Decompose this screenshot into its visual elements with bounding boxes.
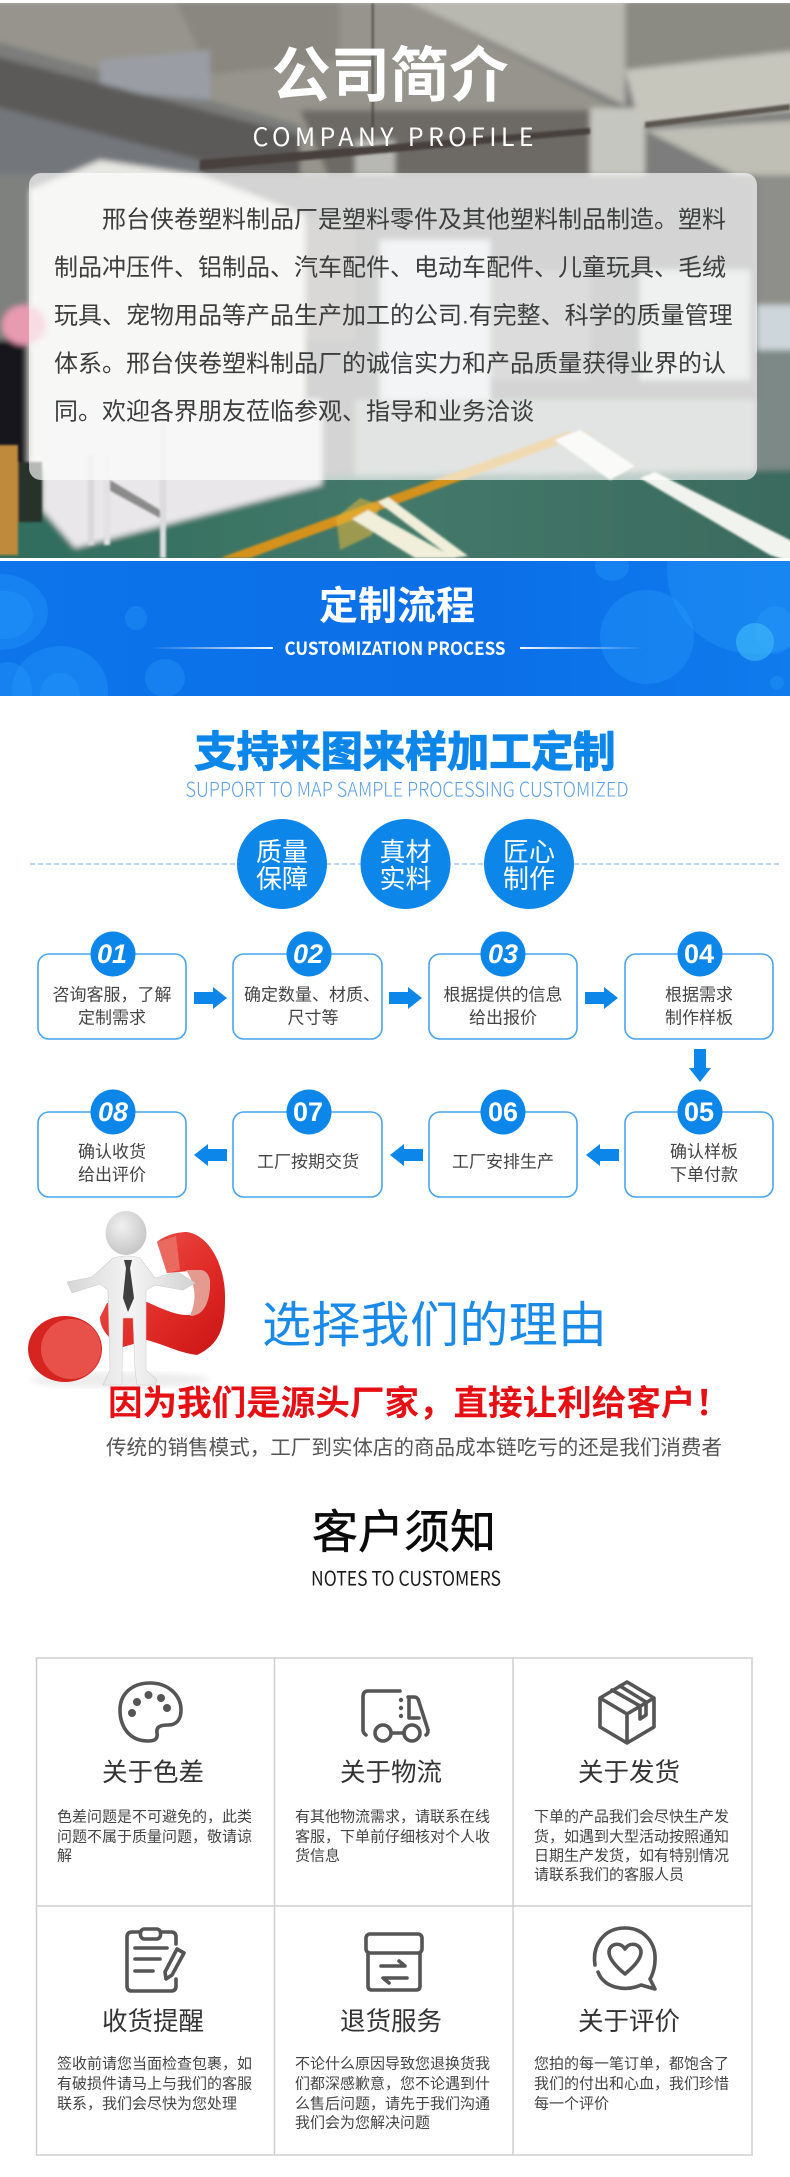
step 05: 下单付款 [670,1166,738,1184]
icon: palette [120,1683,181,1741]
subtitle: CUSTOMIZATION PROCESS [284,635,506,661]
step 02: 尺寸等 [288,1008,338,1028]
badge: quality: 保障 [256,864,308,894]
step 08: 确认收货 [78,1142,146,1162]
illustration: man and red question mark [28,1211,225,1388]
badge: craftsmanship [484,819,574,909]
subtitle: SUPPORT TO MAP SAMPLE PROCESSING CUSTOMIZED [186,774,628,802]
step 01: 01 [97,939,127,969]
text [57,2056,252,2112]
explanatory line: 传统的销售模式，工厂到实体店的商品成本链吃亏的还是我们消费者 [106,1436,722,1460]
text block: 制品冲压件、铝制品、汽车配件、电动车配件、儿童玩具、毛绒 [54,254,726,282]
card: receipt reminder [57,1929,252,2112]
card: returns [295,1934,490,2132]
text: 请联系我们的客服人员 [534,1866,684,1884]
step 08 [78,1097,146,1184]
step 06: 06 [488,1097,518,1127]
text: 解 [57,1848,72,1864]
icon: parcel box [600,1682,654,1743]
feature badges [30,819,782,909]
title: 公司简介 [272,42,508,110]
step 01 [52,939,172,1028]
icon: truck [363,1691,428,1741]
text: 问题不属于质量问题，敬请谅 [57,1828,252,1846]
badge: real material: 实料 [379,864,432,894]
step 07: 07 [293,1097,323,1127]
card: shipping [534,1682,729,1884]
text: 客服，下单前仔细核对个人收 [295,1828,490,1846]
step 04 [665,939,733,1028]
step 04: 根据需求 [665,986,733,1004]
text: 我们会为您解决问题 [295,2114,430,2132]
step 04: 04 [684,939,714,969]
badge: quality [237,819,327,909]
step 01: 定制需求 [78,1008,146,1028]
text [295,2056,490,2132]
text [295,1808,490,1864]
title: 支持来图来样加工定制 [194,728,616,776]
card: colour difference: 关于色差 [102,1759,204,1787]
text: 每一个评价 [534,2096,609,2112]
step 06: 工厂安排生产 [452,1152,554,1172]
text: 不论什么原因导致您退换货我 [295,2056,490,2072]
text: 有其他物流需求，请联系在线 [295,1808,490,1826]
step 05 [670,1097,738,1184]
heading: notes to customers: NOTES TO CUSTOMERS [311,1562,501,1592]
arrows [194,987,711,1166]
text: 下单的产品我们会尽快生产发 [534,1808,729,1826]
step 03: 给出报价 [469,1008,537,1028]
badge: quality: 质量 [256,837,308,867]
icon: return box [366,1934,422,1990]
step 04: 制作样板 [665,1008,733,1028]
notes grid [36,1658,752,2155]
text: 么售后问题，请先于我们沟通 [295,2096,490,2112]
text block: 邢台侠卷塑料制品厂是塑料零件及其他塑料制品制造。塑料 [102,206,726,234]
step 02: 02 [293,939,323,969]
text: 日期生产发货，如有特别情况 [534,1848,729,1864]
card: colour difference [57,1683,252,1864]
text block [54,206,733,426]
step 03 [444,939,562,1028]
text [534,1808,729,1884]
text: 我们的付出和心血，我们珍惜 [534,2076,729,2092]
card: receipt reminder: 收货提醒 [102,2008,204,2036]
badge: real material [360,819,450,909]
subtitle: COMPANY PROFILE [252,118,534,154]
text block: 同。欢迎各界朋友莅临参观、指导和业务洽谈 [54,398,534,426]
card: returns: 退货服务 [340,2008,442,2036]
panel: company description [29,173,757,480]
badge: craftsmanship: 制作 [503,864,555,894]
slogan in red: 因为我们是源头厂家，直接让利给客户！ [108,1385,730,1423]
step 01: 咨询客服，了解 [52,986,172,1004]
text: 货，如遇到大型活动按照通知 [534,1828,729,1846]
step 07: 工厂按期交货 [257,1152,359,1172]
step 08: 给出评价 [78,1166,146,1184]
text [57,1808,252,1864]
text [534,2056,729,2112]
factory photo background [0,0,790,570]
badge: real material: 真材 [379,837,432,867]
card: reviews [534,1928,729,2112]
card: logistics [295,1691,490,1864]
step 07 [257,1097,359,1172]
text block: 体系。邢台侠卷塑料制品厂的诚信实力和产品质量获得业界的认 [54,350,726,378]
title: 定制流程 [319,586,475,628]
step 06 [452,1097,554,1172]
text: 您拍的每一笔订单，都饱含了 [534,2056,729,2072]
heading: notes to customers: 客户须知 [312,1506,496,1558]
heading: notes to customers [311,1506,501,1592]
card: shipping: 关于发货 [578,1759,680,1787]
step 02: 确定数量、材质、 [244,986,380,1004]
step 05: 05 [684,1097,714,1127]
text: 签收前请您当面检查包裹，如 [57,2056,252,2072]
icon: clipboard [127,1929,184,1991]
text: 有破损件请马上与我们的客服 [57,2076,252,2092]
text: 货信息 [295,1848,340,1864]
text block: 玩具、宠物用品等产品生产加工的公司.有完整、科学的质量管理 [54,302,733,330]
text: 色差问题是不可避免的，此类 [57,1808,252,1826]
heading: support custom processing [186,728,628,802]
card: logistics: 关于物流 [340,1759,442,1787]
heading: reasons to choose us: 选择我们的理由 [262,1299,607,1353]
process flow [38,932,773,1197]
text: 联系，我们会尽快为您处理 [57,2096,237,2112]
banner: customization process [0,561,790,696]
step 08: 08 [98,1097,128,1127]
text: 们都深感歉意，您不论遇到什 [295,2074,490,2092]
step 05: 确认样板 [670,1142,738,1162]
card: reviews: 关于评价 [578,2008,680,2036]
step 03: 03 [488,939,518,969]
badge: craftsmanship: 匠心 [503,837,555,867]
heading: company profile [252,42,534,154]
step 03: 根据提供的信息 [444,986,562,1004]
step 02 [244,939,380,1028]
icon: speech bubble with heart [595,1928,655,1989]
